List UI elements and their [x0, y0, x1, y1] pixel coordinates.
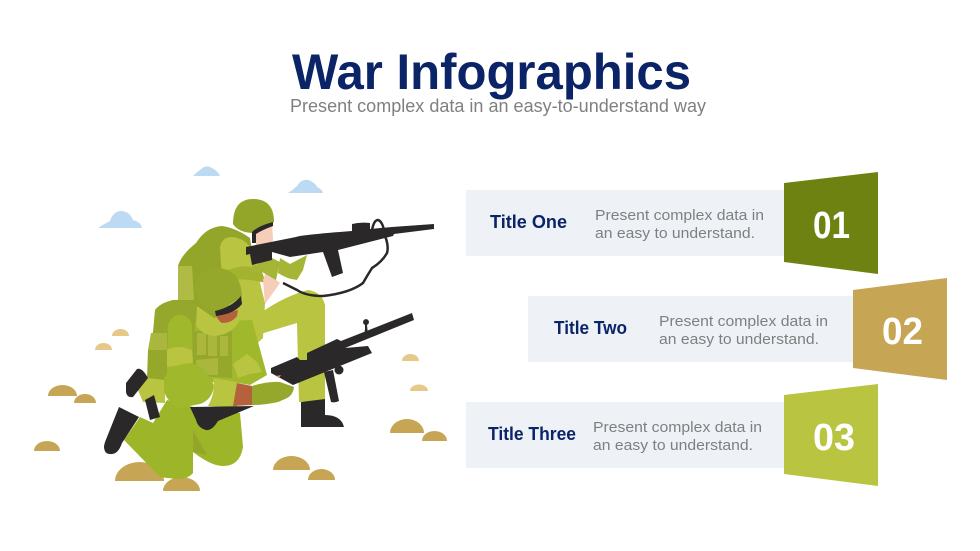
- number tag 01: [784, 172, 878, 274]
- description one: Present complex data in: [595, 207, 764, 224]
- neck: [216, 310, 238, 323]
- sling: [283, 236, 388, 296]
- description three: [593, 419, 762, 454]
- description two: [659, 313, 828, 348]
- small light mounds: [95, 329, 428, 391]
- panel: title one: [466, 172, 878, 274]
- rear boot: [104, 407, 139, 454]
- description two: an easy to understand.: [659, 331, 819, 348]
- sand mounds: [34, 385, 447, 491]
- number 02: 02: [882, 311, 923, 353]
- holster: [126, 369, 148, 397]
- machine gun: [271, 313, 414, 385]
- number tag 03: [784, 384, 878, 486]
- description two: Present complex data in: [659, 313, 828, 330]
- description one: [595, 207, 764, 242]
- boot: [301, 399, 344, 427]
- torso: [195, 320, 267, 385]
- front soldier: [104, 268, 414, 479]
- helmet band: [215, 296, 242, 316]
- cuff: [208, 378, 237, 408]
- heading one: Title One: [490, 212, 567, 232]
- heading three: Title Three: [488, 424, 576, 444]
- number tag 02: [853, 278, 947, 380]
- gun sight: [363, 319, 369, 337]
- row background: [528, 296, 853, 362]
- number 03: 03: [813, 417, 855, 459]
- backpack: [178, 226, 262, 340]
- wrist: [233, 383, 252, 406]
- tactical vest: [195, 331, 232, 378]
- right arm: [233, 354, 262, 378]
- subtitle: Present complex data in an easy-to-understand way: [290, 96, 706, 116]
- face: [256, 222, 273, 246]
- description three: Present complex data in: [593, 419, 762, 436]
- forearm: [164, 363, 214, 408]
- row background: [466, 402, 784, 468]
- front backpack: [147, 300, 232, 385]
- skin: fingers: [276, 375, 281, 378]
- leg: [248, 290, 325, 402]
- row background: [466, 190, 784, 256]
- glove: [278, 255, 307, 280]
- back soldier: [178, 199, 434, 427]
- rifle: [246, 223, 434, 277]
- thigh and knee: [190, 407, 243, 466]
- heading two: Title Two: [554, 318, 627, 338]
- clouds: [98, 166, 323, 228]
- lower leg: [124, 400, 193, 479]
- black sling under arm: [190, 406, 254, 430]
- collar: [196, 306, 241, 336]
- panel: title two: [528, 278, 947, 380]
- illustration: soldiers in the field: [34, 166, 447, 491]
- glove at hip: [138, 378, 165, 403]
- torso: [220, 237, 265, 348]
- bipod: [324, 370, 339, 402]
- title: War Infographics: [292, 44, 691, 100]
- glove on rifle: [252, 382, 294, 405]
- number 01: 01: [813, 205, 850, 247]
- vest pouches: [196, 333, 228, 375]
- description one: an easy to understand.: [595, 225, 755, 242]
- left arm: [167, 315, 193, 378]
- arm: [250, 258, 280, 280]
- helmet: [233, 199, 274, 233]
- front helmet: [195, 268, 242, 312]
- helmet strap: [252, 222, 273, 243]
- description three: an easy to understand.: [593, 437, 753, 454]
- skin: chest: [263, 272, 280, 304]
- panel: title three: [466, 384, 878, 486]
